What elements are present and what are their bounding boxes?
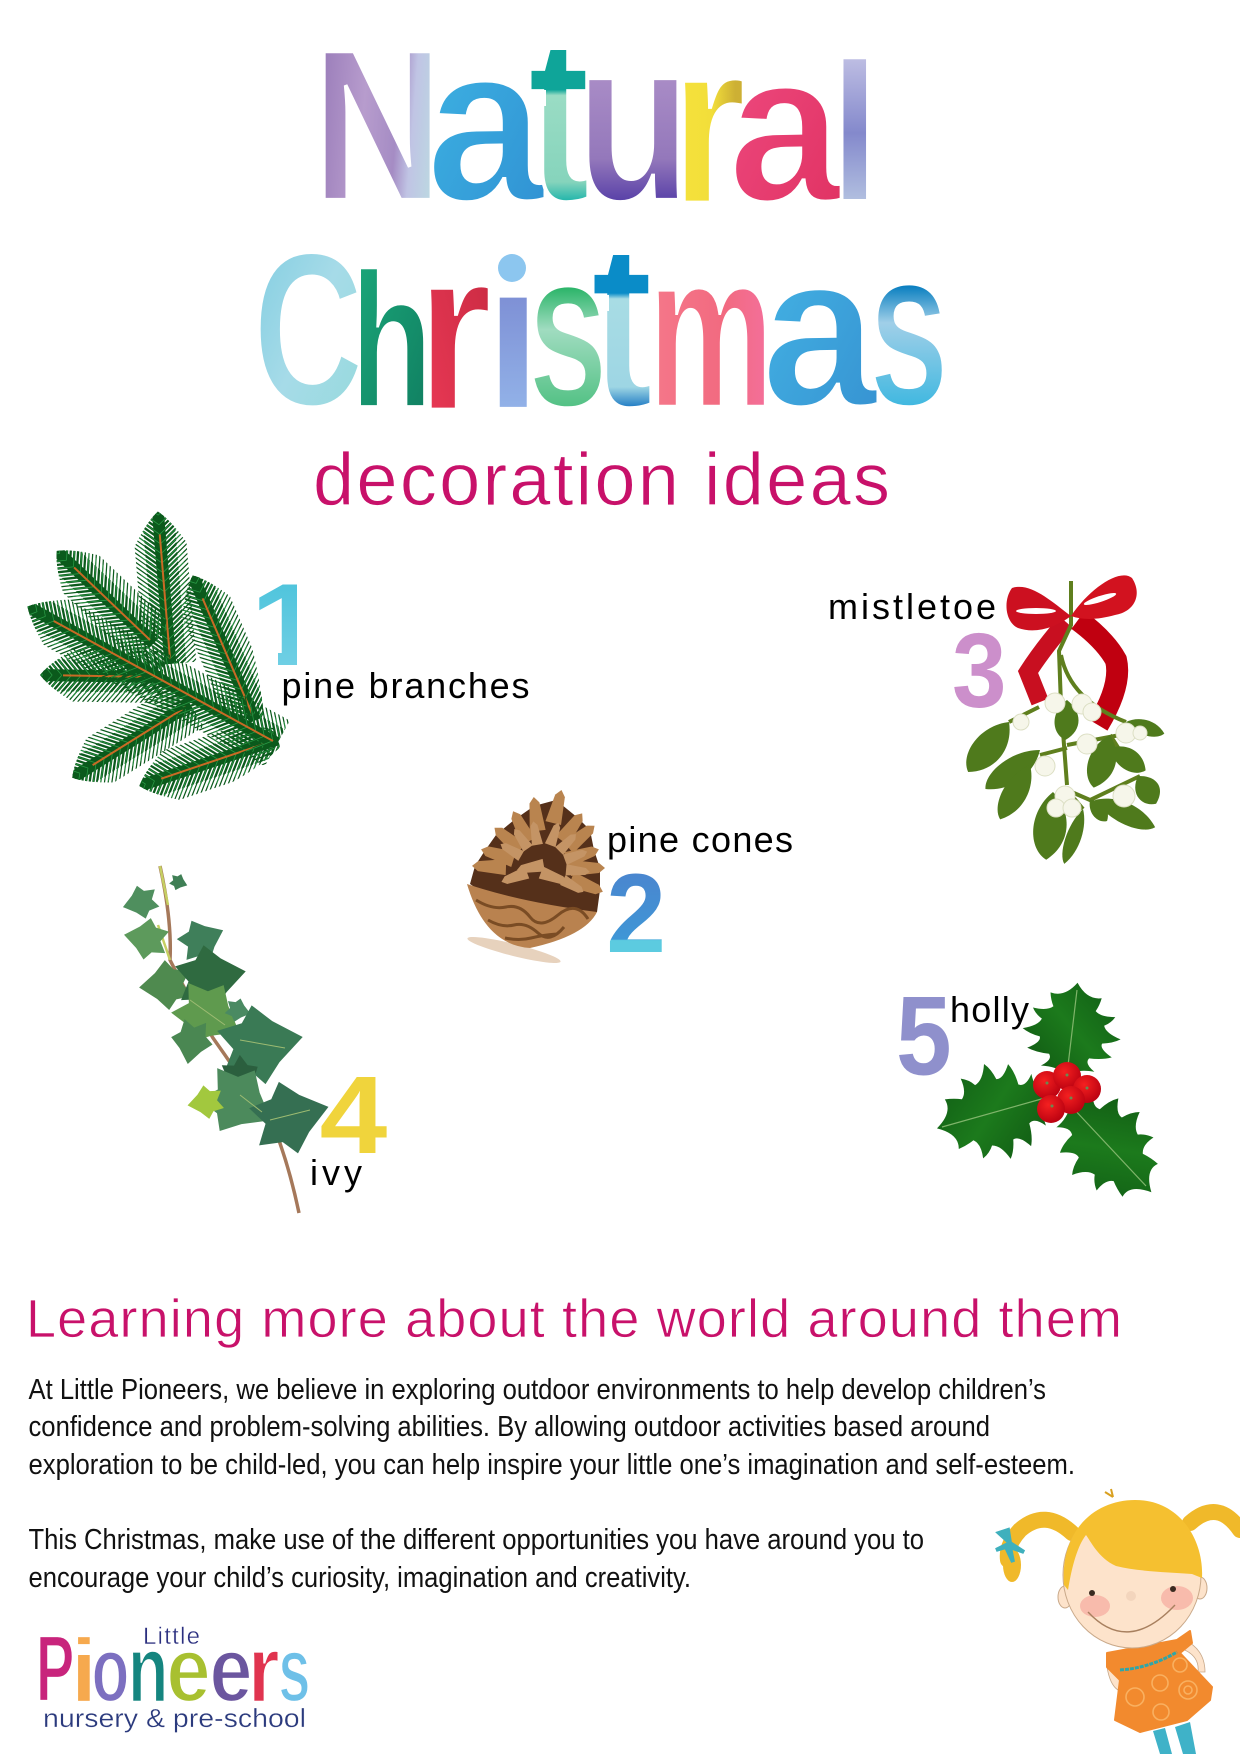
item 2: pine cones (466, 788, 793, 976)
icon: mistletoe with red bow (956, 575, 1167, 866)
icon: pine branch (27, 512, 288, 800)
head (1063, 1502, 1201, 1648)
pigtail right (1190, 1512, 1240, 1530)
logo: Little Pioneers nursery & pre-school: nursery & pre-school (43, 1703, 306, 1733)
item 4: ivy (119, 866, 387, 1213)
title line: Natural: l (828, 22, 882, 244)
title line: Natural: N (312, 6, 444, 246)
subtitle: decoration ideas: decoration ideas (313, 438, 890, 521)
text block: intro paragraph: At Little Pioneers, we believe in exploring outdoor environments to help develop children’s (28, 1374, 1046, 1406)
number 4: 4 (320, 1053, 387, 1177)
logo: Little Pioneers nursery & pre-school: i (70, 1620, 98, 1722)
logo: Little Pioneers nursery & pre-school: P (36, 1615, 74, 1722)
number 3: 3 (952, 611, 1006, 730)
logo: Little Pioneers nursery & pre-school: o (92, 1618, 129, 1721)
text block: intro paragraph: confidence and problem-solving abilities. By allowing outdoor activities based around (28, 1411, 990, 1443)
title line: Natural: a (426, 0, 546, 248)
title (260, 50, 942, 408)
text block: intro paragraph (28, 1374, 1075, 1481)
label: ivy: ivy (310, 1152, 362, 1193)
pigtail left (996, 1520, 1072, 1582)
title line: Christmas: C (253, 207, 364, 453)
item 5: holly (896, 974, 1185, 1224)
logo: Little Pioneers nursery & pre-school: n (128, 1615, 168, 1723)
title line: Christmas: m (648, 206, 774, 455)
label: pine cones: pine cones (607, 819, 793, 860)
label: holly: holly (950, 989, 1029, 1030)
hair (1064, 1500, 1202, 1590)
title line: Christmas: s (528, 204, 608, 455)
logo: Little Pioneers nursery & pre-school: Little (143, 1623, 200, 1650)
text block: intro paragraph: exploration to be child-led, you can help inspire your little one’s imagination and self-esteem. (28, 1449, 1075, 1481)
text block: Christmas paragraph (28, 1524, 924, 1594)
title line: Christmas: s (869, 201, 949, 454)
icon: ivy sprig (119, 866, 338, 1213)
item 3: mistletoe (828, 575, 1167, 866)
heading: Learning more about the world around them: Learning more about the world around them (26, 1289, 1122, 1349)
logo: Little Pioneers nursery & pre-school: s (278, 1618, 311, 1721)
title line: Christmas: t (590, 177, 654, 461)
logo: Little Pioneers nursery & pre-school: r (248, 1616, 280, 1723)
label: pine branches: pine branches (282, 665, 530, 706)
text block: Christmas paragraph: This Christmas, make use of the different opportunities you have around you to (28, 1524, 924, 1556)
logo: Little Pioneers nursery & pre-school: e (209, 1619, 253, 1722)
number 5: 5 (896, 974, 952, 1099)
title line: Christmas: h (350, 233, 433, 449)
title line: Natural (326, 50, 866, 201)
logo: Little Pioneers nursery & pre-school (36, 1615, 311, 1733)
title line: Christmas (260, 254, 942, 408)
title line: Natural: r (670, 0, 747, 253)
text block: Christmas paragraph: encourage your child’s curiosity, imagination and creativity. (28, 1562, 691, 1594)
title line: Christmas: r (416, 200, 493, 460)
title line: Natural: a (728, 9, 844, 246)
item 1: pine branches (27, 512, 528, 800)
ears (1058, 1577, 1207, 1608)
title line: Christmas: i (481, 215, 545, 455)
legs (1153, 1722, 1196, 1754)
arms (1107, 1640, 1205, 1690)
icon: pine cone (466, 788, 606, 967)
number 1: 1 (250, 559, 326, 690)
title line: Christmas: a (761, 209, 879, 452)
icon: holly leaves and berries (924, 977, 1185, 1224)
illustration: girl with pigtails (996, 1489, 1240, 1754)
dress (1107, 1631, 1212, 1732)
number 2: 2 (606, 852, 666, 976)
label: mistletoe: mistletoe (828, 586, 996, 627)
logo: Little Pioneers nursery & pre-school: e (166, 1619, 211, 1721)
